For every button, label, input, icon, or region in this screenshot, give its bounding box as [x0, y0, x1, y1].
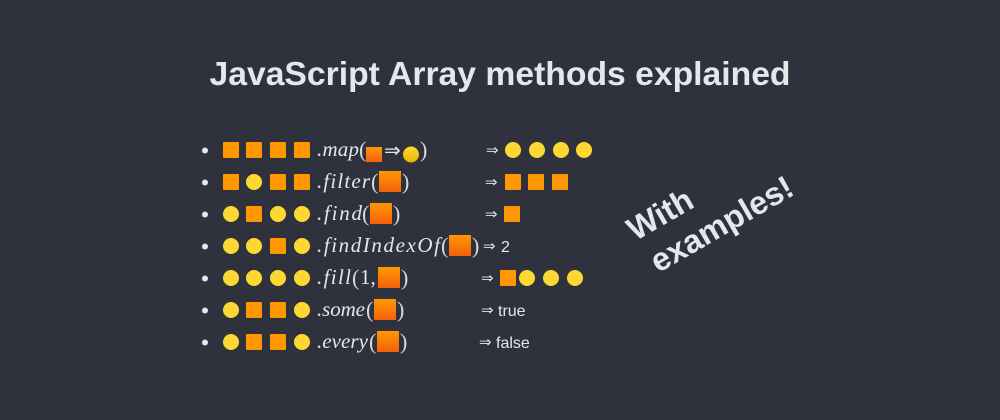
row: filter: ⇒: [485, 173, 498, 191]
row: filter: .filter: [317, 169, 371, 193]
row: some: ): [397, 297, 404, 322]
row: some: true: [498, 303, 526, 320]
row: findIndexOf: [202, 233, 510, 258]
row: some: (: [366, 297, 373, 322]
row: every: ⇒: [479, 333, 492, 351]
row: fill: [202, 265, 583, 290]
row: fill: 1,: [360, 265, 376, 289]
row: map: .map: [317, 137, 359, 161]
row: findIndexOf: ⇒: [483, 237, 496, 255]
row: some: .some: [317, 297, 365, 321]
row: filter: ): [402, 169, 409, 194]
row: fill: ⇒: [481, 269, 494, 287]
rotated callout: With: [621, 181, 699, 247]
row: findIndexOf: ): [472, 233, 479, 258]
row: filter: [202, 169, 568, 194]
row: findIndexOf: 2: [501, 239, 510, 256]
row: find: ): [393, 201, 400, 226]
row: findIndexOf: (: [441, 233, 448, 258]
row: find: (: [362, 201, 369, 226]
row: map: (: [359, 137, 366, 162]
title: JavaScript Array methods explained: [209, 55, 791, 93]
rotated callout: examples!: [644, 169, 799, 279]
row: find: ⇒: [485, 205, 498, 223]
row: map: ⇒: [486, 141, 499, 159]
row: fill: .fill: [317, 265, 351, 289]
row: every: .every: [317, 329, 369, 353]
row: map: ): [420, 137, 427, 162]
row: find: [202, 201, 520, 226]
row: some: ⇒: [481, 301, 494, 319]
row: every: false: [496, 335, 530, 352]
row: every: [202, 329, 530, 354]
row: find: .find: [317, 201, 362, 225]
row: fill: ): [401, 265, 408, 290]
row: map: [202, 137, 592, 162]
row: fill: (: [352, 265, 359, 290]
row: findIndexOf: .findIndexOf: [317, 233, 443, 257]
row: every: ): [400, 329, 407, 354]
row: some: [202, 297, 526, 322]
row: every: (: [369, 329, 376, 354]
row: filter: (: [371, 169, 378, 194]
row: map: ⇒: [384, 138, 401, 162]
